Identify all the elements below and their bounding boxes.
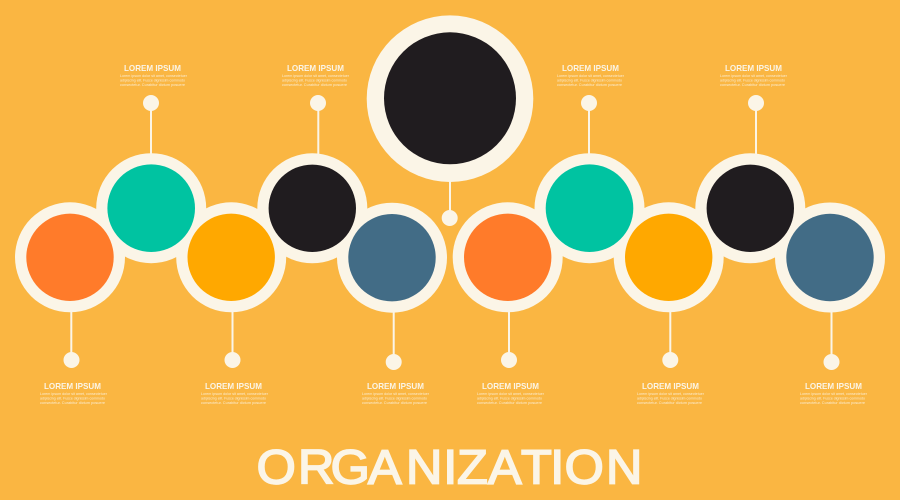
text block: bottom 1	[40, 381, 108, 405]
text block: bottom 1: adipiscing elit. Fusce dignissim commodo	[40, 396, 105, 400]
text block: bottom 1: LOREM IPSUM	[44, 381, 101, 391]
text block: top 2: adipiscing elit. Fusce dignissim commodo	[282, 78, 347, 82]
text block: top 3: adipiscing elit. Fusce dignissim commodo	[557, 78, 622, 82]
text block: top 1: LOREM IPSUM	[124, 63, 181, 73]
circle: amber right	[625, 214, 712, 301]
central black circle	[384, 32, 516, 164]
text block: bottom 1: consectetur. Curabitur dictum posuere	[40, 401, 105, 405]
text block: bottom 4	[477, 381, 545, 405]
text block: top 4	[720, 63, 788, 87]
text block: bottom 5: consectetur. Curabitur dictum posuere	[637, 401, 702, 405]
text block: bottom 5: Lorem ipsum dolor sit amet, consectetuer	[637, 392, 705, 396]
text block: bottom 6: LOREM IPSUM	[805, 381, 862, 391]
circle: amber left	[188, 214, 275, 301]
text block: bottom 3: Lorem ipsum dolor sit amet, consectetuer	[362, 392, 430, 396]
text block: bottom 2	[201, 381, 269, 405]
text block: top 1: Lorem ipsum dolor sit amet, consectetuer	[120, 74, 188, 78]
text block: bottom 2: adipiscing elit. Fusce dignissim commodo	[201, 396, 266, 400]
text block: bottom 6: adipiscing elit. Fusce dignissim commodo	[800, 396, 865, 400]
text block: bottom 1: Lorem ipsum dolor sit amet, consectetuer	[40, 392, 108, 396]
circle: orange left	[26, 214, 114, 301]
text block: bottom 2: Lorem ipsum dolor sit amet, consectetuer	[201, 392, 269, 396]
text block: bottom 5: adipiscing elit. Fusce dignissim commodo	[637, 396, 702, 400]
text block: top 1	[120, 63, 188, 87]
circle: blue right	[786, 214, 874, 301]
circle: blue left	[348, 214, 436, 301]
text block: bottom 3	[362, 381, 430, 405]
text block: top 4: adipiscing elit. Fusce dignissim commodo	[720, 78, 785, 82]
text block: bottom 3: adipiscing elit. Fusce dignissim commodo	[362, 396, 427, 400]
text block: bottom 5	[637, 381, 705, 405]
text block: top 3: Lorem ipsum dolor sit amet, consectetuer	[557, 74, 625, 78]
text block: bottom 3: consectetur. Curabitur dictum posuere	[362, 401, 427, 405]
text block: top 3: LOREM IPSUM	[562, 63, 619, 73]
text block: top 4: consectetur. Curabitur dictum posuere	[720, 83, 785, 87]
text block: top 3: consectetur. Curabitur dictum posuere	[557, 83, 622, 87]
text block: top 3	[557, 63, 625, 87]
circle: orange right	[464, 214, 551, 301]
text block: bottom 6: Lorem ipsum dolor sit amet, consectetuer	[800, 392, 868, 396]
text block: top 4: Lorem ipsum dolor sit amet, consectetuer	[720, 74, 788, 78]
text block: bottom 4: LOREM IPSUM	[482, 381, 539, 391]
circle: black left	[269, 165, 356, 252]
text block: top 2: consectetur. Curabitur dictum posuere	[282, 83, 347, 87]
circle: teal right	[546, 164, 633, 252]
text block: bottom 2: LOREM IPSUM	[205, 381, 262, 391]
text block: bottom 4: consectetur. Curabitur dictum posuere	[477, 401, 542, 405]
text block: top 2	[282, 63, 350, 87]
title: ORGANIZATION	[257, 441, 642, 494]
text block: top 2: LOREM IPSUM	[287, 63, 344, 73]
circle: black right	[707, 165, 794, 252]
connector stems and pins	[64, 95, 840, 370]
text block: top 4: LOREM IPSUM	[725, 63, 782, 73]
cream rings	[15, 15, 885, 313]
text block: bottom 6	[800, 381, 868, 405]
text block: bottom 4: Lorem ipsum dolor sit amet, consectetuer	[477, 392, 545, 396]
text block: bottom 4: adipiscing elit. Fusce dignissim commodo	[477, 396, 542, 400]
text block: bottom 6: consectetur. Curabitur dictum posuere	[800, 401, 865, 405]
text block: top 1: consectetur. Curabitur dictum posuere	[120, 83, 185, 87]
circle: teal left	[107, 164, 195, 252]
text block: top 2: Lorem ipsum dolor sit amet, consectetuer	[282, 74, 350, 78]
text block: bottom 3: LOREM IPSUM	[367, 381, 424, 391]
text block: top 1: adipiscing elit. Fusce dignissim commodo	[120, 78, 185, 82]
text block: bottom 2: consectetur. Curabitur dictum posuere	[201, 401, 266, 405]
text block: bottom 5: LOREM IPSUM	[642, 381, 699, 391]
